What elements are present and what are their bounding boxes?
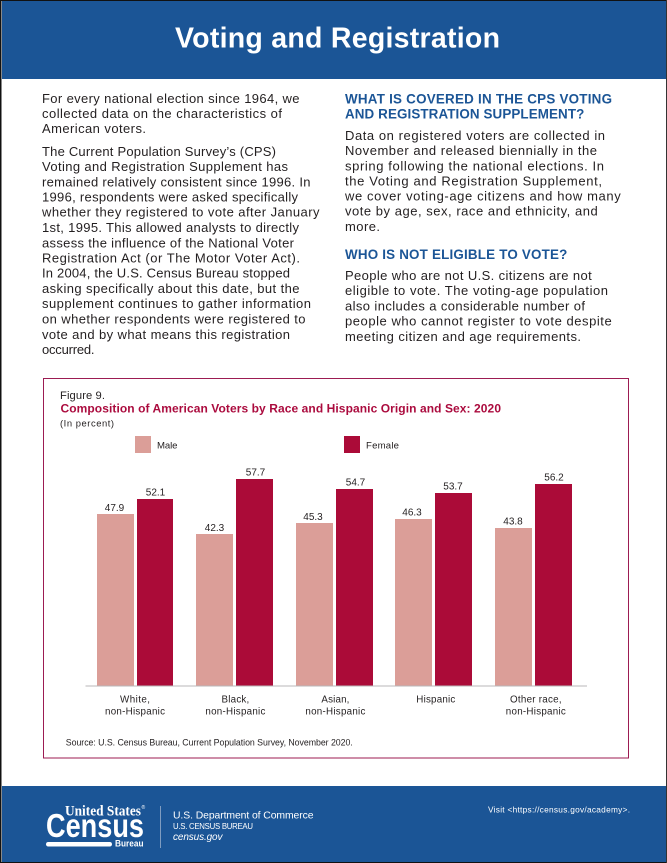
bars: hispanic: 46.3	[402, 508, 422, 518]
heading: what is covered: WHAT IS COVERED IN THE CPS VOTING	[345, 91, 612, 106]
text block: left column introduction: whether they registered to vote after January	[41, 205, 320, 220]
text block: what is covered: the Voting and Registration Supplement,	[345, 173, 602, 188]
text block: left column introduction: Voting and Registration Supplement has	[42, 159, 288, 174]
text block: who is not eligible: meeting citizen and age requirements.	[345, 329, 581, 344]
axis labels	[105, 695, 566, 718]
census logo: ®	[142, 804, 146, 811]
bars: other race, non-Hispanic: 56.2	[544, 472, 564, 484]
bars: other race, non-Hispanic: 43.8	[503, 516, 523, 528]
axis labels: Other race,	[510, 695, 562, 706]
text block: left column introduction: vote and by what means this registration	[42, 327, 290, 342]
department text	[173, 810, 314, 843]
text block: left column introduction: assess the influence of the National Voter	[42, 235, 295, 250]
axis labels: non-Hispanic	[205, 707, 265, 718]
text block: what is covered	[344, 91, 621, 234]
bars: white, non-Hispanic	[97, 488, 173, 686]
text block: left column introduction: Registration Act (or The Motor Voter Act).	[42, 250, 300, 266]
bar chart	[86, 468, 587, 686]
legend: male	[135, 436, 178, 453]
text block: what is covered: more.	[345, 219, 380, 234]
text block: left column introduction	[41, 91, 320, 357]
axis labels: non-Hispanic	[305, 707, 365, 718]
text block: left column introduction: In 2004, the U.S. Census Bureau stopped	[42, 266, 290, 281]
axis labels: Black,	[222, 695, 249, 706]
unit note: (In percent)	[60, 418, 114, 429]
text block: what is covered: we cover voting-age citizens and how many	[344, 189, 621, 204]
text block: left column introduction: 1st, 1995. This allowed analysts to directly	[42, 220, 300, 235]
text block: who is not eligible: also includes a considerable number of	[345, 299, 585, 314]
legend: female: Female	[366, 440, 399, 452]
bars: asian, non-Hispanic: 54.7	[346, 478, 366, 488]
census logo	[46, 804, 146, 850]
census logo: Census	[46, 807, 144, 844]
title: Voting and Registration	[175, 22, 500, 54]
text block: who is not eligible: people who cannot register to vote despite	[345, 314, 612, 329]
text block: what is covered: November and released biennially in the	[345, 143, 597, 158]
footer banner	[2, 786, 666, 862]
heading: what is covered: AND REGISTRATION SUPPLEMENT?	[345, 106, 584, 121]
text block: who is not eligible	[345, 247, 612, 344]
bars: black, non-Hispanic: 42.3	[205, 523, 225, 534]
census logo: United States	[65, 804, 141, 820]
department text: census.gov	[173, 832, 224, 843]
chart title: Composition of American Voters by Race and Hispanic Origin and Sex: 2020	[60, 402, 501, 416]
text block: left column introduction: American voters.	[42, 121, 146, 136]
legend: female	[344, 436, 399, 453]
text block: what is covered: spring following the national elections. In	[345, 158, 604, 173]
bars: asian, non-Hispanic	[296, 478, 373, 686]
axis labels: White,	[120, 695, 150, 706]
axis labels: non-Hispanic	[105, 707, 165, 718]
bars: hispanic	[395, 482, 472, 686]
figure label: Figure 9.	[60, 390, 105, 402]
census logo: Bureau	[115, 839, 144, 850]
axis labels: Hispanic	[416, 695, 455, 706]
bars: asian, non-Hispanic: 45.3	[303, 512, 323, 523]
text block: left column introduction: collected data on the characteristics of	[42, 106, 282, 121]
bars: white, non-Hispanic: 52.1	[146, 488, 166, 498]
axis labels: non-Hispanic	[506, 707, 566, 718]
department text: U.S. Department of Commerce	[173, 810, 314, 821]
legend: male: Male	[157, 440, 178, 452]
text block: who is not eligible: eligible to vote. The voting-age population	[345, 283, 608, 298]
heading: what is covered	[345, 91, 612, 121]
text block: left column introduction: asking specifically about this date, but the	[42, 281, 300, 296]
bars: other race, non-Hispanic	[495, 472, 572, 686]
website link: Visit <https://census.gov/academy>.	[488, 805, 630, 815]
panel: figure 9 chart	[44, 378, 628, 758]
bars: black, non-Hispanic: 57.7	[246, 468, 266, 478]
text block: left column introduction: occurred.	[42, 342, 94, 357]
text block: what is covered: vote by age, sex, race and ethnicity, and	[345, 204, 598, 219]
text block: left column introduction: supplement continues to gather information	[42, 296, 311, 311]
text block: left column introduction: 1996, respondents were asked specifically	[42, 190, 298, 205]
source note: Source: U.S. Census Bureau, Current Population Survey, November 2020.	[66, 738, 353, 748]
text block: left column introduction: on whether respondents were registered to	[42, 312, 306, 326]
bars: hispanic: 53.7	[443, 482, 463, 492]
axis labels: Asian,	[321, 695, 349, 706]
department text: U.S. CENSUS BUREAU	[173, 822, 253, 831]
text block: what is covered: Data on registered voters are collected in	[345, 128, 605, 143]
text block: left column introduction: For every national election since 1964, we	[42, 91, 300, 106]
text block: left column introduction: remained relatively consistent since 1996. In	[42, 174, 310, 189]
text block: who is not eligible: People who are not U.S. citizens are not	[345, 268, 592, 283]
text block: left column introduction: The Current Population Survey’s (CPS)	[42, 144, 276, 159]
heading: who is not eligible: WHO IS NOT ELIGIBLE TO VOTE?	[345, 247, 567, 262]
bars: black, non-Hispanic	[196, 468, 273, 686]
header banner	[2, 1, 667, 79]
bars: white, non-Hispanic: 47.9	[105, 503, 125, 514]
